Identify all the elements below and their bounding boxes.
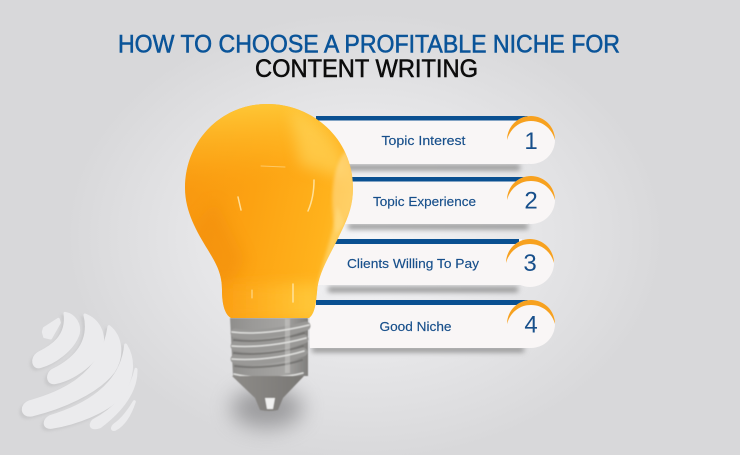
logo watermark: striped globe	[21, 313, 136, 430]
title: CONTENT WRITING	[255, 55, 478, 83]
list item 4: Good Niche	[310, 300, 555, 352]
list item 3: Clients Willing To Pay	[316, 239, 554, 292]
list item 3: Clients Willing To Pay: Clients Willing To Pay	[347, 256, 480, 271]
infographic canvas	[19, 34, 620, 440]
title: HOW TO CHOOSE A PROFITABLE NICHE FOR	[118, 30, 620, 58]
list item 2: Topic Experience: 2	[524, 188, 538, 214]
light bulb illustration	[180, 100, 360, 428]
list item 4: Good Niche: 4	[524, 312, 538, 338]
list item 2: Topic Experience	[316, 176, 555, 229]
list item 2: Topic Experience: Topic Experience	[373, 194, 476, 209]
list item 1: Topic Interest	[316, 116, 555, 170]
list item 1: Topic Interest: Topic Interest	[382, 133, 466, 148]
title	[118, 30, 620, 83]
bulb glass	[180, 100, 360, 320]
bulb cast shadow	[231, 388, 303, 428]
list item 4: Good Niche: Good Niche	[380, 319, 452, 334]
list item 3: Clients Willing To Pay: 3	[523, 250, 537, 277]
bulb screw base	[230, 318, 309, 411]
list item 1: Topic Interest: 1	[524, 128, 538, 155]
